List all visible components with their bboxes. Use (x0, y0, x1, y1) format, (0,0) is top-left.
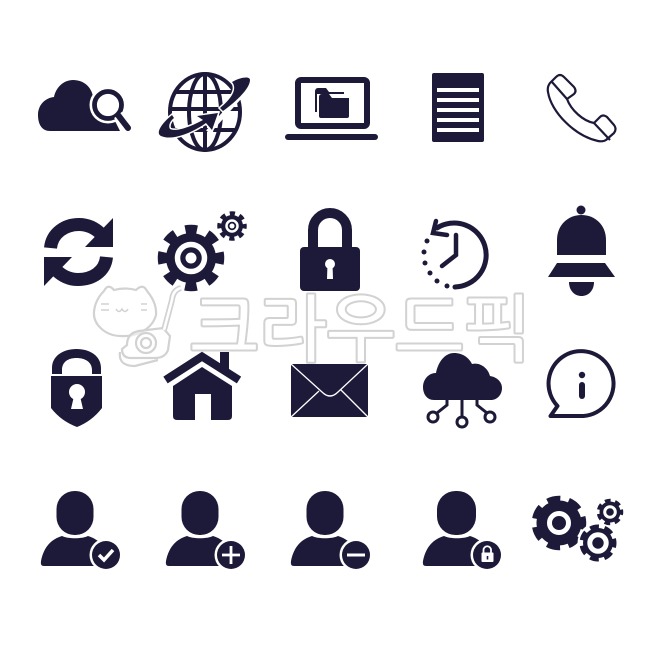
icon: cloud network (423, 353, 502, 427)
large gear (164, 231, 218, 285)
watermark: brand text: 크라우드픽 (190, 293, 532, 366)
icon: cloud search (38, 80, 130, 131)
icon: user remove (291, 491, 372, 572)
icon: history clock (422, 221, 486, 288)
medium gear (578, 522, 618, 564)
icon: three gears (536, 500, 621, 564)
watermark: cat with camera (94, 287, 181, 366)
icon: gears pair (164, 214, 244, 285)
icon: shield lock (51, 349, 102, 427)
large gear (536, 500, 582, 546)
icon: document (432, 73, 484, 142)
icon: sync arrows (44, 218, 113, 286)
icon: laptop with folders (285, 80, 378, 140)
small gear (599, 501, 621, 523)
icon: house (166, 352, 239, 420)
icon: phone handset (548, 75, 616, 141)
icon: user add (166, 491, 248, 572)
icon: user locked (423, 491, 504, 572)
icon: padlock (300, 213, 360, 291)
icon: globe with orbit (159, 74, 250, 150)
small gear (220, 214, 244, 238)
icon: bell (548, 206, 615, 296)
icon: envelope (291, 364, 368, 417)
icon: user check (41, 491, 122, 572)
icon: info bubble (549, 351, 614, 416)
